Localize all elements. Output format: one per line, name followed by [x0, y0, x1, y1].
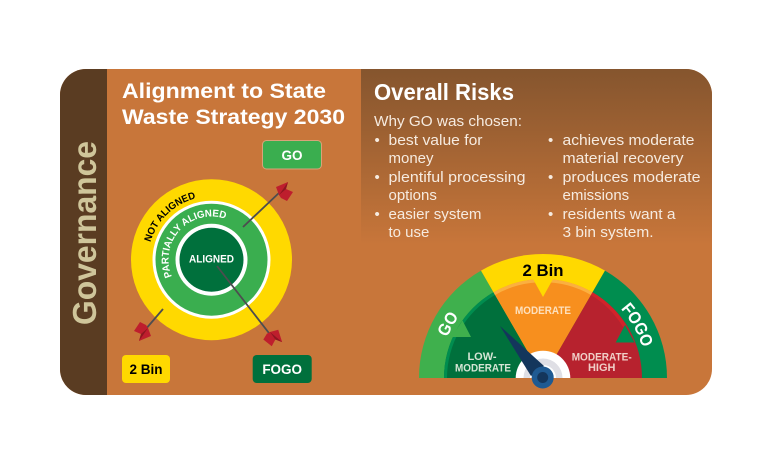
label: FOGO: FOGO — [262, 362, 302, 377]
text block: why GO was chosen, right column: emissions — [562, 187, 629, 204]
pointer notches — [452, 320, 471, 337]
arrow: FOGO — [217, 266, 283, 347]
gauge label: LOW-MODERATE — [455, 351, 511, 374]
text block: why GO was chosen, left column: • — [374, 132, 380, 149]
gauge label: FOGO: FOGO — [621, 302, 652, 346]
text block: why GO was chosen, right column: • — [548, 206, 553, 223]
heading: Alignment to State Waste Strategy 2030: Alignment to State — [122, 80, 326, 103]
label: FOGO — [253, 355, 312, 383]
ring label: NOT ALIGNED: NOT ALIGNED — [144, 192, 195, 242]
ring label: ALIGNED: ALIGNED — [189, 254, 234, 266]
gauge label: MODERATE: MODERATE — [515, 305, 571, 317]
text block: why GO was chosen, right column — [548, 132, 700, 241]
gauge outer: 2 Bin segment — [481, 254, 605, 378]
text block: why GO was chosen, left column: easier system — [388, 206, 482, 223]
label: GO: GO — [281, 148, 303, 163]
text block: why GO was chosen, left column: Why GO was chosen: — [374, 113, 522, 130]
label: 2 Bin: 2 Bin — [129, 362, 163, 377]
text block: why GO was chosen, left column: options — [388, 187, 437, 204]
text block: why GO was chosen, right column: residents want a — [562, 206, 676, 223]
ring label: PARTIALLY ALIGNED: PARTIALLY ALIGNED — [162, 210, 226, 278]
gauge label: 2 Bin: 2 Bin — [522, 261, 564, 280]
panel: card background — [60, 69, 712, 395]
gauge hub backing — [516, 351, 570, 378]
text block: why GO was chosen, right column: • — [548, 132, 553, 149]
text block: why GO was chosen, right column: material recovery — [562, 150, 684, 167]
heading: Alignment to State Waste Strategy 2030 — [122, 80, 345, 129]
gauge label: GO: GO — [438, 312, 457, 336]
heading: Alignment to State Waste Strategy 2030: Waste Strategy 2030 — [122, 106, 345, 129]
gauge inner: moderate-high segment — [543, 292, 642, 378]
gauge needle — [500, 326, 554, 388]
gauge inner: low-moderate segment — [444, 292, 543, 378]
gauge: risk meter — [419, 254, 667, 388]
gauge inner: moderate segment — [494, 279, 592, 378]
text block: why GO was chosen, right column: 3 bin system. — [562, 224, 654, 241]
text block: why GO was chosen, left column: money — [388, 150, 434, 167]
arrow: GO — [243, 182, 293, 227]
text block: why GO was chosen, left column: plentiful processing — [388, 169, 526, 186]
text block: why GO was chosen, right column: produces moderate — [562, 169, 700, 186]
text block: why GO was chosen, right column: • — [548, 169, 553, 186]
heading: Overall Risks: Overall Risks — [374, 79, 514, 105]
gauge label: LOW-MODERATE: MODERATE — [455, 362, 511, 374]
text block: why GO was chosen, left column — [374, 113, 526, 241]
target: alignment rings — [131, 179, 292, 340]
gauge label: MODERATE-HIGH: HIGH — [588, 362, 616, 374]
text block: why GO was chosen, right column: achieves moderate — [562, 132, 694, 149]
text block: why GO was chosen, left column: • — [374, 169, 380, 186]
gauge outer: GO segment — [419, 271, 543, 378]
label: GO — [262, 140, 322, 169]
heading: Governance: Governance — [66, 141, 103, 325]
label: 2 Bin — [122, 355, 170, 383]
arrow: 2 Bin — [134, 309, 163, 341]
text block: why GO was chosen, left column: • — [374, 206, 380, 223]
gauge label: MODERATE-HIGH — [572, 352, 632, 374]
gauge label: MODERATE-HIGH: MODERATE- — [572, 352, 632, 364]
text block: why GO was chosen, left column: best value for — [388, 132, 482, 149]
gauge label: LOW-MODERATE: LOW- — [467, 351, 497, 363]
gauge outer: FOGO segment — [543, 271, 667, 378]
text block: why GO was chosen, left column: to use — [388, 224, 429, 241]
